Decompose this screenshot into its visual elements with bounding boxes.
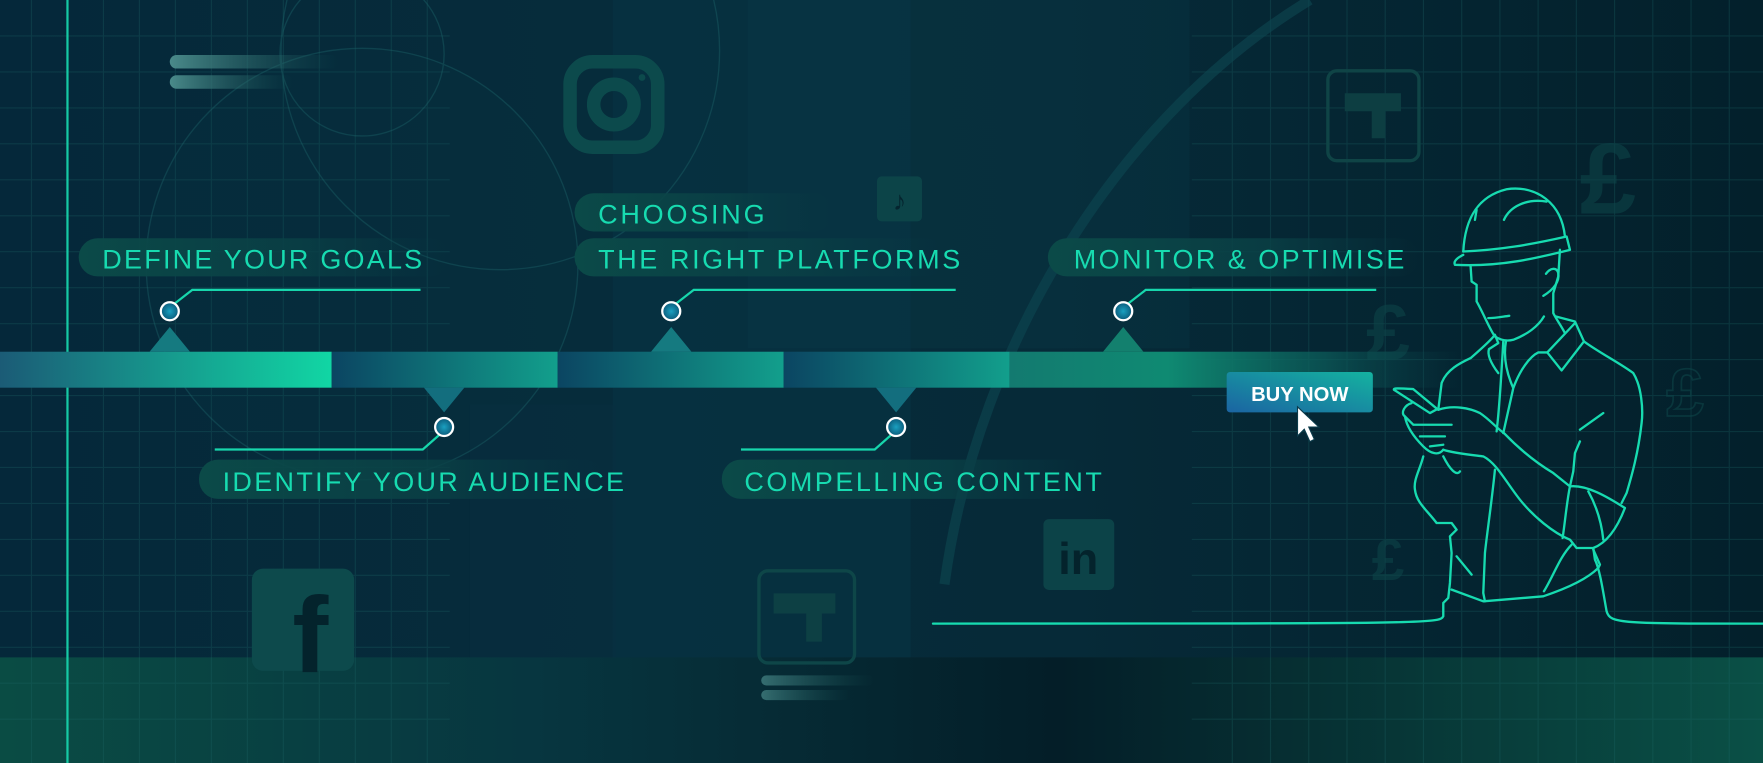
buy now button [1227,372,1373,442]
timeline bar [0,327,1459,412]
milestone: monitor & optimise: MONITOR & OPTIMISE [1074,245,1404,275]
illustration: man with phone [933,189,1763,624]
icon: pound signs [1366,123,1704,593]
milestone: choosing the right platforms: CHOOSING [598,200,765,230]
milestone: choosing the right platforms: THE RIGHT PLATFORMS [598,245,960,275]
icon: drill top [1328,71,1419,161]
decorative circles [146,0,720,480]
icon: instagram [570,62,658,147]
icon: pound signs: £ [1580,123,1636,235]
milestone: choosing the right platforms [575,193,960,320]
milestone: identify your audience [199,418,624,499]
icon: linkedin [1043,519,1114,590]
milestone: identify your audience: IDENTIFY YOUR AUDIENCE [223,467,624,497]
icon: tiktok [877,176,922,221]
milestone: compelling content [722,418,1102,499]
vertical line [66,0,69,763]
icon: facebook: f [292,574,329,695]
milestone: monitor & optimise [1048,238,1419,320]
speed lines [170,55,338,89]
icon: pound signs: £ [1666,356,1704,431]
icon: linkedin: in [1058,533,1098,584]
milestone: compelling content: COMPELLING CONTENT [744,467,1102,497]
icon: pound signs: £ [1366,289,1410,377]
icon: cursor [1298,407,1319,442]
icon: drill bottom [759,571,874,700]
milestone: define your goals [79,238,450,320]
big arc [944,0,1310,584]
milestone: define your goals: DEFINE YOUR GOALS [102,245,423,275]
buy now button: BUY NOW [1251,384,1349,406]
icon: tiktok: ♪ [893,186,906,216]
icon: facebook [252,569,354,695]
icon: pound signs: £ [1372,528,1404,593]
